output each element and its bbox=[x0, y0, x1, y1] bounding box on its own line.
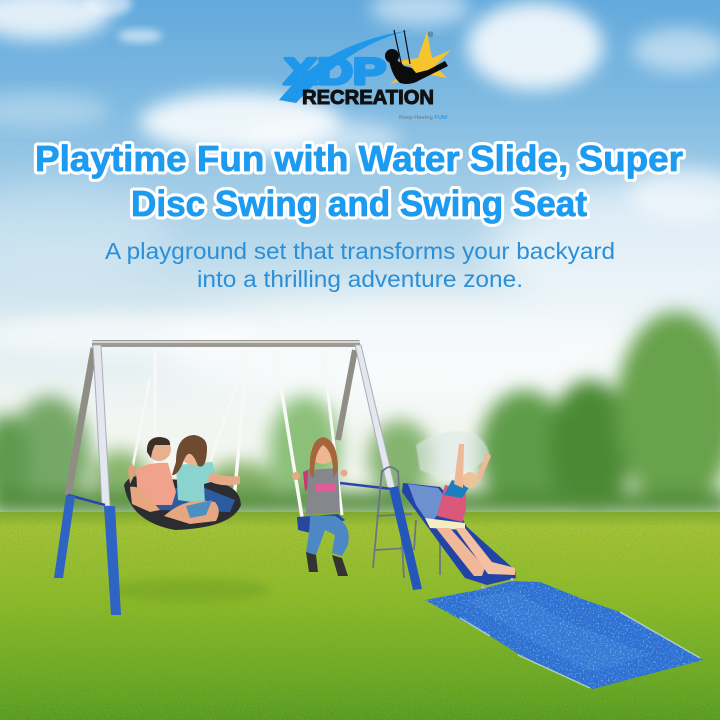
front left leg bbox=[93, 345, 110, 506]
girl on slide bbox=[425, 444, 515, 576]
logo wordmark: RECREATION bbox=[302, 87, 434, 109]
slide legs bbox=[483, 578, 512, 600]
grass shadow under swings bbox=[110, 578, 270, 602]
water slide bbox=[402, 483, 516, 585]
disc swing ropes bbox=[132, 348, 248, 522]
title: Disc Swing and Swing Seat bbox=[131, 183, 587, 224]
logo swing silhouette bbox=[385, 30, 448, 84]
top bar bbox=[92, 340, 360, 347]
logo star bbox=[390, 32, 451, 84]
left foam sleeves bbox=[54, 495, 75, 578]
background: sky bbox=[0, 0, 720, 520]
grass texture bbox=[0, 514, 720, 720]
rear left leg bbox=[68, 348, 94, 495]
logo bbox=[279, 30, 451, 121]
right foam sleeve bbox=[389, 486, 422, 590]
boy bbox=[136, 463, 176, 505]
registered mark: ® bbox=[428, 31, 434, 39]
girl bbox=[176, 462, 218, 504]
logo tagline: Keep Having FUN! bbox=[399, 115, 448, 121]
title bbox=[35, 138, 683, 224]
logo swoosh bbox=[279, 30, 412, 103]
right cross brace bbox=[340, 483, 392, 489]
children on disc swing bbox=[128, 435, 240, 524]
subtitle bbox=[105, 238, 615, 292]
title: Playtime Fun with Water Slide, Super bbox=[35, 138, 683, 179]
subtitle: into a thrilling adventure zone. bbox=[197, 266, 523, 292]
clouds bbox=[0, 0, 720, 405]
background: blurred trees bbox=[0, 312, 720, 516]
background: grass bbox=[0, 512, 720, 720]
water splash bbox=[416, 431, 490, 478]
title: Disc Swing and Swing Seat bbox=[131, 183, 587, 224]
front right leg bbox=[355, 345, 395, 490]
title: Playtime Fun with Water Slide, Super bbox=[35, 138, 683, 179]
disc swing seat bbox=[124, 476, 241, 530]
left cross brace bbox=[68, 495, 105, 505]
girl on swing seat bbox=[292, 437, 349, 576]
subtitle: A playground set that transforms your backyard bbox=[105, 238, 615, 264]
logo letters XDP: XDP bbox=[284, 51, 386, 92]
swing set frame bbox=[54, 340, 395, 615]
rear right leg bbox=[338, 350, 355, 440]
seat swing ropes bbox=[275, 350, 342, 517]
water mat bbox=[425, 581, 703, 689]
ladder bbox=[373, 467, 440, 578]
